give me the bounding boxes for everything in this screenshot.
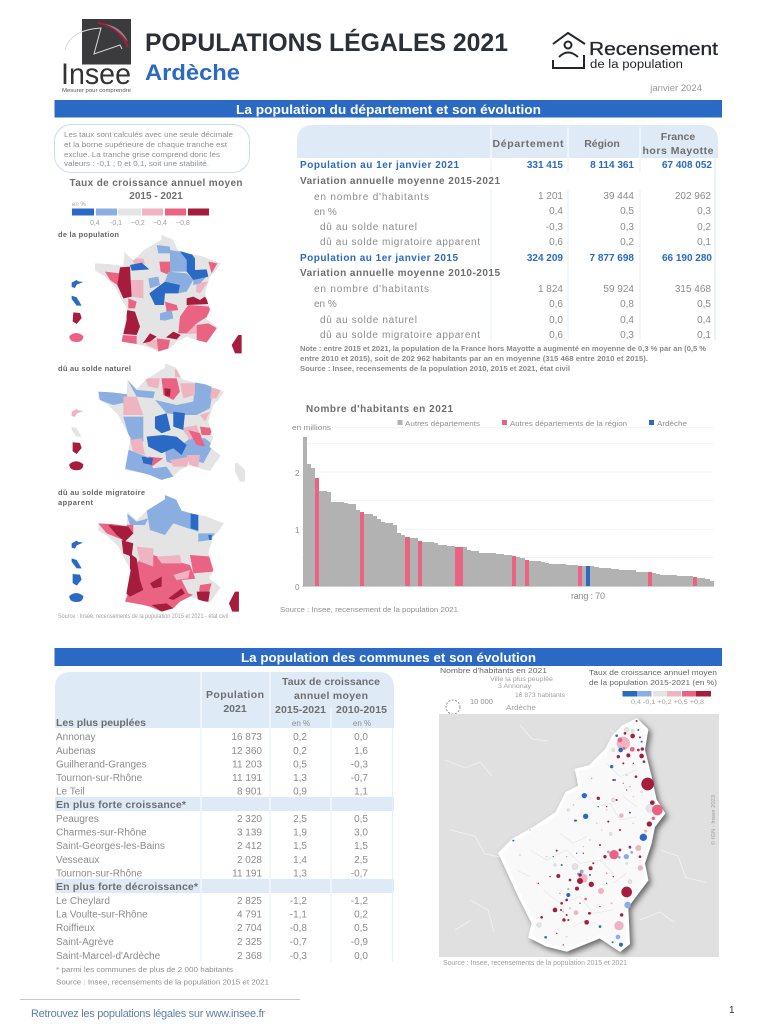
rows: 2015-2021 detail: 202 962: [675, 191, 711, 202]
rows: 2010-2015 detail: 0,1: [697, 330, 711, 341]
note box: exclue. La tranche grise comprend donc les: [64, 150, 220, 159]
section header: communes: [54, 648, 722, 666]
map legend: ~0,2: [131, 220, 145, 227]
map: communes of Ardèche: © IGN - Insee 2023: [710, 795, 717, 845]
chart legend: Ardèche: [657, 419, 687, 428]
map legend: population circles: Ardèche: [506, 705, 536, 712]
group: en plus forte croissance: 1,3: [293, 868, 307, 880]
group: les plus peuplées: -0,3: [351, 760, 368, 770]
map legend: population circles: [440, 666, 565, 714]
rows: 2010-2015 detail: 0,0: [549, 315, 563, 326]
map heading: Taux de croissance annuel moyen: [70, 178, 242, 189]
group: en plus forte décroissance: -0,7: [290, 937, 307, 948]
circles: dark red: [538, 720, 655, 946]
group: les plus peuplées: 8 901: [237, 786, 262, 798]
group: en plus forte décroissance: -0,9: [351, 937, 368, 948]
rows: 2015-2021 detail: 0,1: [697, 237, 711, 248]
logo: Insee: Mesurer pour comprendre: [62, 88, 131, 94]
table notes: [56, 965, 269, 986]
map label: solde migratoire: [58, 488, 145, 507]
group: en plus forte décroissance: 0,2: [354, 910, 368, 920]
map legend: 0,4: [90, 220, 100, 227]
chart legend: Autres départements de la région: [510, 419, 627, 428]
table note: [300, 344, 706, 373]
group: en plus forte décroissance: -1,2: [290, 896, 307, 907]
table note: entre 2010 et 2015), soit de 202 962 habitants par an en moyenne (315 468 entre 2010 et 2015).: [300, 354, 648, 363]
group: les plus peuplées: -0,7: [351, 773, 368, 784]
map legend: [72, 202, 209, 227]
group: les plus peuplées: 0,2: [293, 746, 307, 757]
row: population 2015: 66 190 280: [662, 253, 712, 264]
group: en plus forte décroissance: 2 825: [237, 896, 262, 907]
rows: 2015-2021 detail: 0,3: [697, 206, 711, 217]
rows: 2015-2021 detail: dû au solde migratoire apparent: [320, 237, 480, 248]
row: variation 2010-2015: Variation annuelle moyenne 2010-2015: [300, 268, 500, 279]
group: les plus peuplées: 1,1: [354, 786, 368, 798]
rows: 2015-2021 detail: 0,4: [549, 206, 563, 217]
table: département: Région: [584, 138, 620, 150]
table: communes: [55, 672, 394, 962]
row: variation 2015-2021: Variation annuelle moyenne 2015-2021: [300, 176, 500, 187]
group: en plus forte croissance: 2 028: [237, 855, 262, 866]
group: en plus forte croissance: 2 320: [237, 814, 262, 825]
map: natural balance: [69, 362, 245, 482]
map legend: en %: [72, 202, 86, 208]
map legend: ~0,4: [153, 220, 167, 227]
footer rule: [20, 998, 300, 1000]
logo: Recensement de la population: Recensement: [589, 38, 718, 59]
rows: 2010-2015 detail: 315 468: [675, 284, 711, 295]
note box: [54, 124, 250, 172]
logo: Insee: [61, 19, 131, 94]
group: en plus forte croissance: -0,7: [351, 868, 368, 880]
map heading: [70, 178, 242, 202]
row: population 2015: 7 877 698: [590, 253, 634, 264]
table note: Note : entre 2015 et 2021, la population de la France hors Mayotte a augmenté en moyenne de 0,3 % par an (0,5 %: [300, 344, 706, 353]
commune boundaries: [517, 763, 637, 927]
table header: [206, 676, 387, 728]
group: en plus forte croissance: 11 191: [232, 868, 262, 880]
group: en plus forte croissance: En plus forte croissance*: [56, 799, 187, 811]
logo: Recensement de la population: [553, 33, 718, 71]
map heading: 2015 - 2021: [129, 191, 183, 202]
group: en plus forte croissance: Vesseaux: [56, 855, 99, 866]
circles: light blue: [529, 778, 633, 939]
group: les plus peuplées: 11 191: [232, 773, 262, 784]
group: les plus peuplées: 0,2: [293, 732, 307, 743]
table header: en %: [353, 719, 371, 728]
note box: Les taux sont calculés avec une seule décimale: [64, 130, 233, 139]
row: population 2015: [300, 253, 712, 264]
rows: 2010-2015 detail: 0,3: [620, 330, 634, 341]
logo: Insee: Insee: [61, 58, 131, 91]
group: les plus peuplées: 1,3: [293, 773, 307, 784]
group: en plus forte croissance: [56, 799, 368, 880]
group: les plus peuplées: Annonay: [56, 732, 95, 743]
rows: 2010-2015 detail: en nombre d'habitants: [314, 284, 429, 295]
group: en plus forte croissance: 1,4: [293, 855, 307, 866]
group: en plus forte croissance: Tournon-sur-Rhône: [56, 868, 143, 880]
group: en plus forte décroissance: 4 791: [237, 910, 262, 920]
chart axis: en millions: [292, 423, 331, 432]
subtitle: Ardèche: Ardèche: [145, 60, 240, 85]
group: en plus forte décroissance: 2 368: [237, 951, 262, 962]
chart axis: rang : 70: [571, 591, 605, 601]
group: en plus forte décroissance: -0,3: [290, 951, 307, 962]
group: en plus forte décroissance: -1,1: [290, 910, 307, 920]
group: les plus peuplées: [56, 717, 368, 798]
table header: Taux de croissance: [282, 676, 380, 688]
group: les plus peuplées: Guilherand-Granges: [56, 760, 147, 770]
rows: 2010-2015 detail: [314, 284, 711, 341]
table notes: * parmi les communes de plus de 2 000 habitants: [56, 965, 233, 974]
rows: 2010-2015 detail: en %: [314, 299, 337, 310]
rows: 2015-2021 detail: 0,3: [620, 222, 634, 233]
rows: 2015-2021 detail: 0,2: [620, 237, 634, 248]
group: les plus peuplées: 0,0: [354, 732, 368, 743]
map legend: ~0,8: [176, 220, 190, 227]
chart title: Nombre d'habitants en 2021: [306, 404, 453, 415]
map legend: population circles: 3 Annonay: [498, 684, 531, 690]
circles: grey: [519, 728, 654, 937]
group: en plus forte croissance: Charmes-sur-Rhône: [56, 828, 147, 838]
rows: 2015-2021 detail: 39 444: [603, 191, 634, 202]
group: en plus forte croissance: 1,5: [293, 841, 307, 852]
map label: de la population: de la population: [58, 230, 119, 239]
rows: 2010-2015 detail: 0,4: [620, 315, 634, 326]
group: en plus forte décroissance: En plus forte décroissance*: [56, 881, 199, 893]
row: population 2015: Population au 1er janvier 2015: [300, 253, 458, 264]
table: département: hors Mayotte: [642, 145, 714, 157]
table note: Source : Insee, recensements de la population 2010, 2015 et 2021, état civil: [300, 364, 570, 373]
section header: communes: La population des communes et son évolution: [241, 650, 536, 665]
group: en plus forte décroissance: Le Cheylard: [56, 896, 110, 907]
map: population growth: [69, 233, 242, 353]
row: population 2021: [300, 160, 712, 171]
group: les plus peuplées: Les plus peuplées: [56, 717, 146, 729]
table notes: Source : Insee, recensements de la population 2015 et 2021: [56, 978, 269, 986]
bar chart: [303, 437, 714, 586]
group: en plus forte croissance: 2,5: [354, 855, 368, 866]
chart axis: 2: [295, 469, 300, 478]
group: en plus forte décroissance: Roiffieux: [56, 923, 95, 934]
group: les plus peuplées: 12 360: [231, 746, 262, 757]
rows: 2010-2015 detail: 0,8: [620, 299, 634, 310]
footer link: Retrouvez les populations légales sur www.insee.fr: [31, 1008, 265, 1020]
group: en plus forte décroissance: -0,8: [290, 923, 307, 934]
rows: 2015-2021 detail: dû au solde naturel: [320, 222, 417, 233]
group: en plus forte décroissance: 2 704: [237, 923, 262, 934]
rows: 2010-2015 detail: 1 824: [538, 284, 563, 295]
rows: 2015-2021 detail: 0,2: [697, 222, 711, 233]
section header: département: La population du département et son évolution: [236, 102, 541, 117]
group: en plus forte croissance: 1,5: [354, 841, 368, 852]
date: janvier 2024: [649, 83, 702, 94]
circles: blue: [512, 729, 647, 947]
group: les plus peuplées: 11 203: [232, 760, 262, 770]
map legend: population circles: 10 000: [470, 697, 493, 706]
map label: solde migratoire: apparent: [58, 498, 94, 507]
rows: 2010-2015 detail: dû au solde naturel: [320, 315, 417, 326]
group: les plus peuplées: Le Teil: [56, 786, 85, 798]
row: population 2021: 67 408 052: [662, 160, 712, 171]
rows: 2015-2021 detail: [314, 191, 711, 248]
note box: valeurs : -0,1 ; 0 et 0,1, soit une stabilité.: [64, 159, 209, 168]
group: en plus forte croissance: 3 139: [237, 828, 262, 838]
group: en plus forte croissance: Saint-Georges-les-Bains: [56, 841, 165, 852]
rows: 2015-2021 detail: 0,5: [620, 206, 634, 217]
rows: 2010-2015 detail: 0,6: [549, 330, 563, 341]
group: en plus forte décroissance: -1,2: [351, 896, 368, 907]
group: en plus forte croissance: Peaugres: [56, 814, 99, 825]
rows: 2010-2015 detail: dû au solde migratoire apparent: [320, 330, 480, 341]
row: population 2021: 331 415: [527, 160, 563, 171]
row: population 2021: 8 114 361: [590, 160, 634, 171]
map legend: growth: de la population 2015-2021 (en %): [589, 678, 718, 687]
group: en plus forte décroissance: 2 325: [237, 937, 262, 948]
table header: Population: [206, 689, 264, 701]
rows: 2015-2021 detail: en %: [314, 207, 337, 218]
group: en plus forte décroissance: Saint-Marcel-d'Ardèche: [56, 951, 161, 962]
map: migration balance: [69, 493, 239, 613]
map source: communes: Source : Insee, recensements de la population 2015 et 2021: [443, 960, 627, 967]
chart axis: 1: [295, 526, 300, 535]
chart axis: [292, 423, 714, 601]
chart axis: 0: [295, 583, 300, 592]
map legend: growth: 0,4 -0,1 +0,2 +0,5 +0,8: [631, 700, 705, 706]
page number: 1: [729, 1005, 735, 1016]
chart legend: [398, 419, 687, 428]
group: en plus forte croissance: 1,9: [293, 828, 307, 838]
map legend: population circles: Ville la plus peuplée: [490, 677, 554, 683]
table: département: France: [661, 131, 695, 143]
table header: annuel moyen: [294, 690, 368, 702]
chart legend: Autres départements: [405, 419, 480, 428]
chart source: Source : Insee, recensement de la population 2021: [280, 605, 458, 614]
row: population 2015: 324 209: [527, 253, 563, 264]
group: les plus peuplées: Tournon-sur-Rhône: [56, 773, 143, 784]
map legend: -0,1: [110, 220, 122, 227]
table: département: Département: [492, 138, 564, 150]
group: en plus forte décroissance: 0,0: [354, 951, 368, 962]
group: les plus peuplées: 0,5: [293, 760, 307, 770]
note box: et la borne supérieure de chaque tranche est: [64, 140, 228, 149]
group: en plus forte décroissance: 0,5: [354, 923, 368, 934]
group: en plus forte décroissance: Saint-Agrève: [56, 937, 114, 948]
table header: en %: [292, 719, 310, 728]
group: en plus forte croissance: 3,0: [354, 828, 368, 838]
table header: 2021: [223, 703, 247, 715]
map legend: population circles: 16 873 habitants: [515, 693, 565, 699]
title: POPULATIONS LÉGALES 2021: [145, 28, 508, 57]
row: population 2021: Population au 1er janvier 2021: [300, 160, 459, 171]
group: les plus peuplées: 1,6: [354, 746, 368, 757]
group: en plus forte croissance: 0,5: [354, 814, 368, 825]
rows: 2015-2021 detail: en nombre d'habitants: [314, 192, 429, 203]
rows: 2010-2015 detail: 0,6: [549, 299, 563, 310]
map legend: growth: Taux de croissance annuel moyen: [589, 668, 717, 677]
circles: pink: [559, 738, 663, 915]
map legend: population circles: Nombre d'habitants en 2021: [440, 666, 547, 675]
rows: 2015-2021 detail: 0,6: [549, 237, 563, 248]
group: les plus peuplées: 0,9: [293, 786, 307, 798]
rows: 2010-2015 detail: 59 924: [603, 284, 634, 295]
rows: 2015-2021 detail: 1 201: [538, 191, 563, 202]
section header: département: [54, 100, 722, 118]
circles: light pink: [536, 737, 647, 930]
group: les plus peuplées: 16 873: [231, 732, 262, 743]
table header: 2010-2015: [336, 704, 387, 716]
logo: Recensement de la population: de la population: [590, 59, 683, 71]
map legend: growth: [589, 668, 718, 706]
group: en plus forte croissance: 2 412: [237, 841, 262, 852]
group: les plus peuplées: Aubenas: [56, 746, 95, 757]
rows: 2010-2015 detail: 0,5: [697, 299, 711, 310]
rows: 2015-2021 detail: -0,3: [546, 222, 563, 233]
map: communes of Ardèche: [439, 714, 719, 957]
map source: Source : Insee, recensements de la population 2015 et 2021 - état civil: [58, 614, 228, 620]
table: département: [297, 125, 718, 341]
map label: solde migratoire: dû au solde migratoire: [58, 488, 145, 497]
group: en plus forte décroissance: La Voulte-sur-Rhône: [56, 910, 148, 920]
group: en plus forte décroissance: [56, 881, 368, 962]
table header: 2015-2021: [275, 704, 326, 716]
map label: solde naturel: dû au solde naturel: [58, 364, 131, 373]
rows: 2010-2015 detail: 0,4: [697, 315, 711, 326]
group: en plus forte croissance: 2,5: [293, 814, 307, 825]
